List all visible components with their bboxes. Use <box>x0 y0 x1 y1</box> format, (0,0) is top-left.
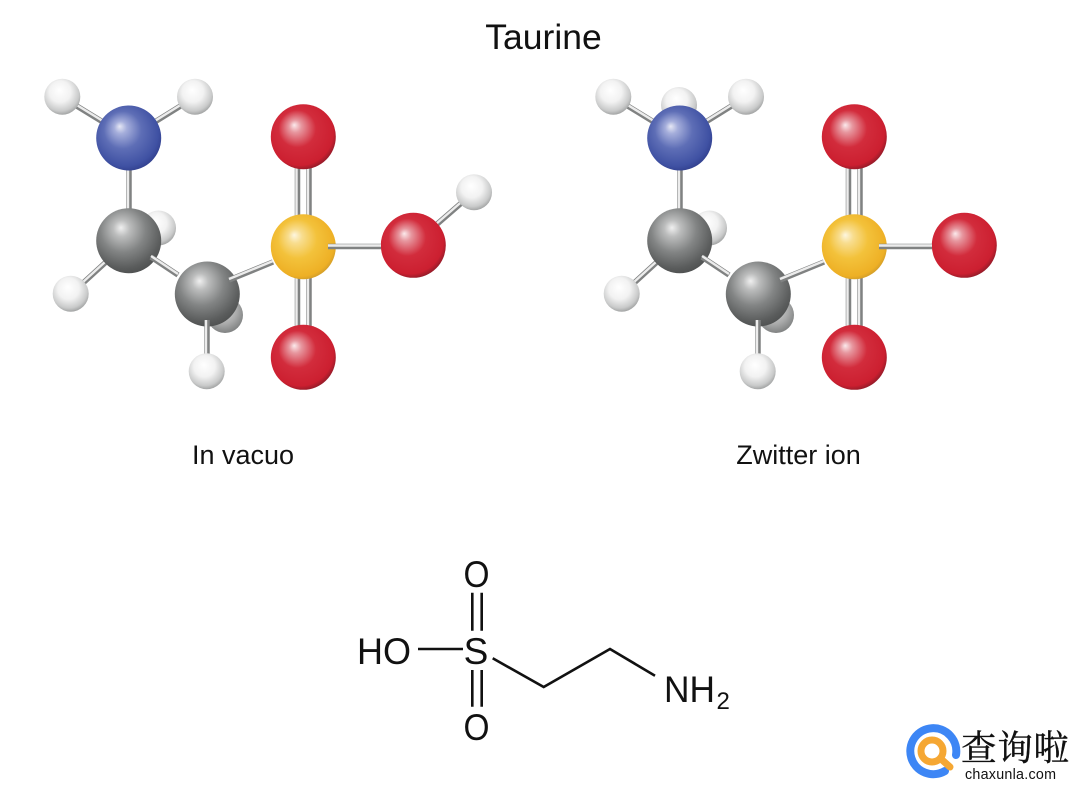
atom: oxygen top: O <box>464 554 490 595</box>
skeletal formula <box>357 554 730 748</box>
hydrogen atom <box>740 353 776 389</box>
sulfur atom <box>822 214 887 279</box>
hydrogen atom <box>53 276 89 312</box>
hydrogen behind nitrogen <box>661 87 697 123</box>
label: zwitter ion: Zwitter ion <box>736 440 861 470</box>
oxygen atom right <box>932 213 997 278</box>
nitrogen atom <box>647 106 712 170</box>
hydrogen atom <box>728 79 764 115</box>
hydrogen atom <box>44 79 80 115</box>
icon: magnifier <box>910 728 956 774</box>
hydrogen behind carbon 1 <box>692 210 727 246</box>
molecule: in vacuo <box>44 79 492 390</box>
nitrogen atom <box>96 106 161 170</box>
atom: oxygen bottom: O <box>464 707 490 748</box>
bonds over atoms <box>702 246 932 356</box>
hydrogen atom <box>604 276 640 312</box>
atom: hydroxyl: HO <box>357 631 411 672</box>
carbon atom 2 <box>726 262 791 326</box>
oxygen atom right <box>381 213 446 278</box>
hydrogen behind carbon 2 <box>207 297 243 333</box>
title: Taurine <box>485 17 602 57</box>
hydrogen behind carbon 2 <box>758 297 794 333</box>
oxygen atom top <box>271 104 336 169</box>
carbon atom 1 <box>96 208 161 273</box>
hydrogen atom <box>189 353 225 389</box>
amine subscript: 2 <box>716 688 730 715</box>
oxygen atom top <box>822 104 887 169</box>
carbon atom 2 <box>175 262 240 326</box>
oxygen atom bottom <box>822 325 887 390</box>
label: in vacuo: In vacuo <box>192 440 294 470</box>
molecule: zwitter ion <box>595 79 997 390</box>
hydrogen behind carbon 1 <box>141 210 176 246</box>
oxygen atom bottom <box>271 325 336 390</box>
atom: sulfur: S <box>464 631 488 672</box>
logo wordmark: 查询啦 <box>961 720 1069 771</box>
hydrogen atom <box>177 79 213 115</box>
sulfur atom <box>271 214 336 279</box>
atom: amine: NH <box>664 669 715 710</box>
watermark logo <box>910 720 1069 783</box>
logo url: chaxunla.com <box>965 767 1056 783</box>
bonds over atoms <box>151 246 381 356</box>
carbon atom 1 <box>647 208 712 273</box>
hydrogen atom <box>456 174 492 210</box>
skeletal bonds <box>418 593 655 707</box>
hydrogen atom <box>595 79 631 115</box>
